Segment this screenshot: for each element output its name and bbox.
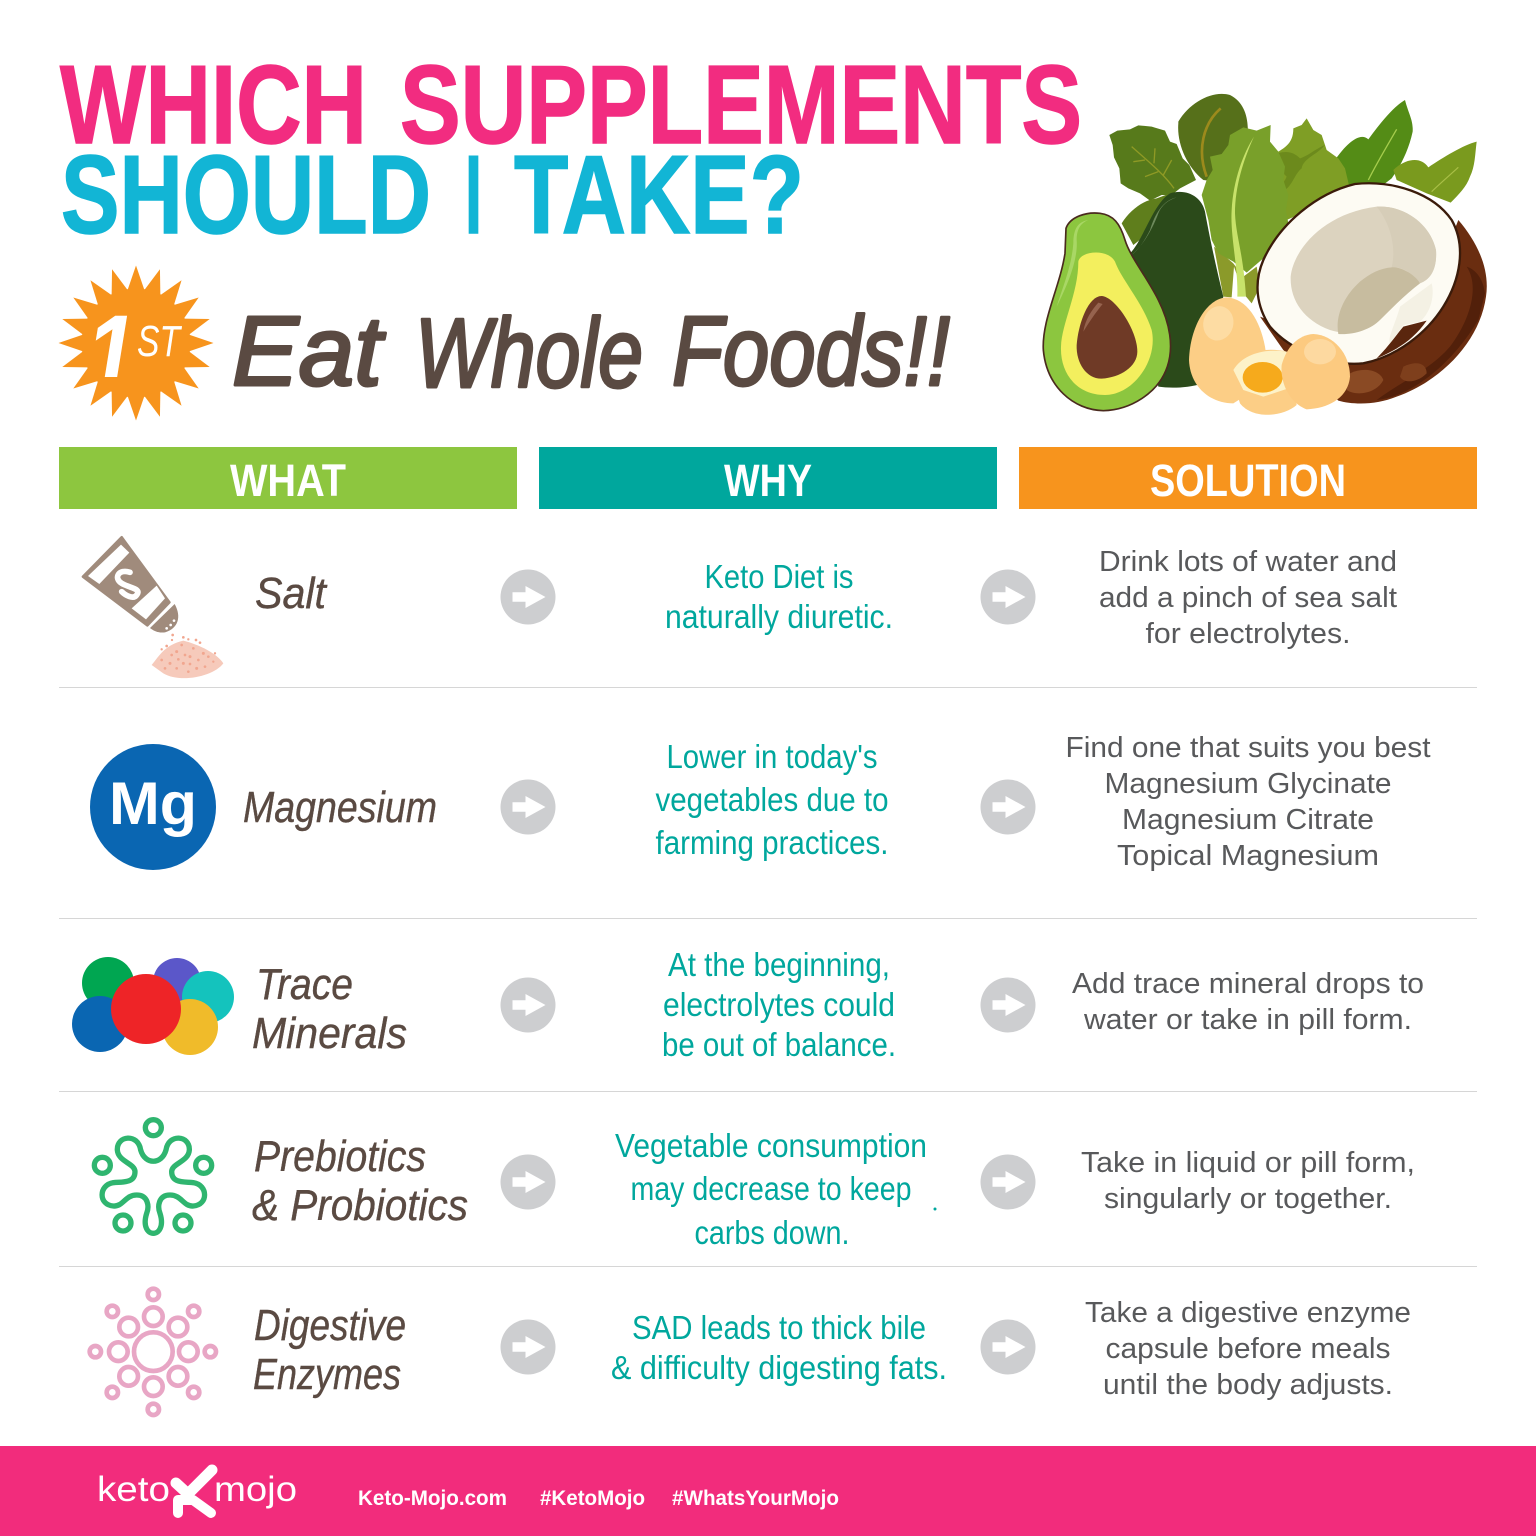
solution text: add a pinch of sea salt xyxy=(1099,582,1397,614)
why text: carbs down. xyxy=(694,1214,850,1251)
solution text: Topical Magnesium xyxy=(1117,840,1379,872)
why text: At the beginning, xyxy=(668,946,890,983)
badge: 1st starburst xyxy=(58,266,214,420)
badge: 1st starburst: ST xyxy=(137,317,182,366)
solution text xyxy=(1072,968,1424,1036)
leaf: back dark xyxy=(1178,94,1248,183)
illustration: whole foods xyxy=(1043,94,1487,415)
why text xyxy=(611,1309,947,1386)
solution text: water or take in pill form. xyxy=(1083,1004,1412,1036)
why text: Vegetable consumption xyxy=(615,1127,927,1164)
solution text xyxy=(1085,1297,1411,1401)
solution text xyxy=(1081,1147,1415,1215)
row: magnesium xyxy=(90,732,1430,872)
arrow xyxy=(980,1320,1036,1374)
leaf: center back xyxy=(1262,118,1349,220)
label: salt: Salt xyxy=(255,569,328,618)
solution text: for electrolytes. xyxy=(1146,618,1350,650)
row: salt xyxy=(83,537,1397,678)
title: I xyxy=(465,133,482,257)
logo: keto mojo: mojo xyxy=(214,1470,297,1509)
title: SUPPLEMENTS xyxy=(400,43,1082,167)
leaf: far left xyxy=(1109,125,1196,201)
label: prebiotics and probiotics xyxy=(252,1132,468,1230)
arrow xyxy=(500,570,556,624)
arrow xyxy=(500,1154,556,1210)
solution text: until the body adjusts. xyxy=(1103,1369,1393,1401)
title: TAKE? xyxy=(514,133,804,257)
icon: enzymes xyxy=(90,1289,216,1415)
label: digestive enzymes: Enzymes xyxy=(253,1350,401,1399)
why text: farming practices. xyxy=(656,824,888,861)
solution text: capsule before meals xyxy=(1106,1333,1390,1365)
solution text: Take a digestive enzyme xyxy=(1085,1297,1411,1329)
label: prebiotics and probiotics: & Probiotics xyxy=(252,1181,468,1230)
solution text: Magnesium Citrate xyxy=(1122,804,1374,836)
subtitle xyxy=(232,296,950,408)
footer band xyxy=(0,1446,1536,1536)
solution text xyxy=(1099,546,1397,650)
icon: probiotics xyxy=(94,1120,212,1233)
column header: why xyxy=(539,447,997,509)
footer link: Keto-Mojo.com xyxy=(358,1487,507,1510)
solution text xyxy=(1066,732,1430,872)
column header: why: WHY xyxy=(724,455,812,506)
title xyxy=(60,43,1082,257)
title: WHICH xyxy=(60,43,367,167)
why text xyxy=(665,558,893,635)
row: trace minerals xyxy=(72,946,1424,1063)
column header: solution: SOLUTION xyxy=(1150,455,1346,506)
logo: keto mojo: keto xyxy=(97,1470,170,1509)
subtitle: Eat xyxy=(232,296,386,406)
hashtag: #WhatsYourMojo xyxy=(672,1487,839,1510)
why text: SAD leads to thick bile xyxy=(632,1309,926,1346)
coconut xyxy=(1258,183,1487,404)
why text xyxy=(662,946,896,1063)
solution text: Magnesium Glycinate xyxy=(1104,768,1392,800)
label: digestive enzymes: Digestive xyxy=(254,1301,406,1350)
icon: salt shaker xyxy=(83,537,223,678)
leaf: big center xyxy=(1202,125,1288,297)
column header: solution xyxy=(1019,447,1477,509)
row: digestive enzymes xyxy=(90,1289,1411,1415)
avocado half xyxy=(1043,213,1171,411)
arrow xyxy=(500,978,556,1032)
why text: may decrease to keep xyxy=(630,1170,912,1207)
why text: naturally diuretic. xyxy=(665,598,893,635)
solution text: Take in liquid or pill form, xyxy=(1081,1147,1415,1179)
subtitle: Whole xyxy=(415,298,643,408)
leaf: lower left xyxy=(1122,193,1170,245)
solution text: Find one that suits you best xyxy=(1066,732,1430,764)
label: trace minerals: Trace xyxy=(256,960,353,1009)
label: digestive enzymes xyxy=(253,1301,406,1399)
label: trace minerals xyxy=(252,960,407,1058)
eggs xyxy=(1189,297,1350,415)
why text: & difficulty digesting fats. xyxy=(611,1349,947,1386)
title: SHOULD xyxy=(61,133,431,257)
why text: Lower in today's xyxy=(666,738,878,775)
solution text: Add trace mineral drops to xyxy=(1072,968,1424,1000)
label: magnesium: Magnesium xyxy=(243,783,437,832)
column header: what xyxy=(59,447,517,509)
why text: Keto Diet is xyxy=(704,558,854,595)
why text xyxy=(656,738,888,861)
label: prebiotics and probiotics: Prebiotics xyxy=(254,1132,426,1181)
icon: magnesium xyxy=(90,744,216,870)
why text xyxy=(615,1127,927,1251)
subtitle: Foods!! xyxy=(672,296,950,406)
arrow xyxy=(980,780,1036,834)
column header: what: WHAT xyxy=(230,455,346,506)
dark avocado xyxy=(1130,192,1223,388)
why text: electrolytes could xyxy=(663,986,895,1023)
icon: magnesium: Mg xyxy=(109,770,197,837)
label: trace minerals: Minerals xyxy=(252,1009,407,1058)
solution text: Drink lots of water and xyxy=(1099,546,1397,578)
icon: trace minerals xyxy=(72,957,234,1055)
arrow xyxy=(980,570,1036,624)
arrow xyxy=(980,1154,1036,1210)
arrow xyxy=(500,780,556,834)
why text: be out of balance. xyxy=(662,1026,896,1063)
leaf: right front xyxy=(1393,142,1477,203)
badge: 1st starburst: 1 xyxy=(86,292,136,413)
why text: vegetables due to xyxy=(656,781,888,818)
hashtag: #KetoMojo xyxy=(540,1487,645,1510)
leaf: right back xyxy=(1335,100,1413,187)
stems xyxy=(1214,247,1260,303)
arrow xyxy=(980,978,1036,1032)
logo: keto mojo xyxy=(97,1470,297,1513)
solution text: singularly or together. xyxy=(1104,1183,1392,1215)
row: prebiotics and probiotics xyxy=(94,1120,1415,1251)
arrow xyxy=(500,1320,556,1374)
